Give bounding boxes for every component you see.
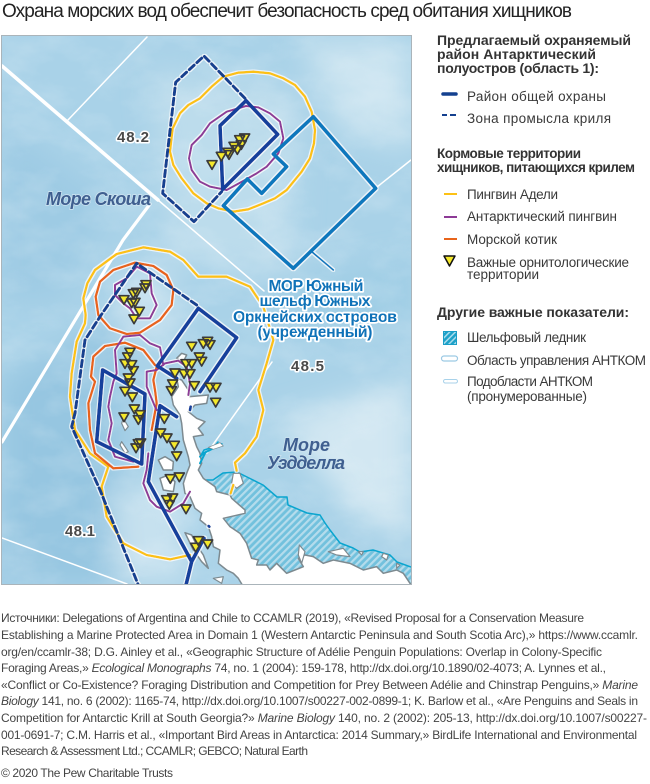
legend: fur seal: Морской котик [467, 232, 557, 247]
krill fishery zone, South Orkney [163, 56, 245, 222]
label: Weddell Sea: Море [283, 435, 330, 455]
fur seal range, north [96, 263, 173, 334]
legend: proposed protected area [437, 32, 631, 126]
chinstrap penguin ranges, Peninsula [108, 267, 190, 512]
legend: CCAMLR subareas: Подобласти АНТКОМ [467, 374, 593, 389]
important bird areas, South Orkney [207, 134, 250, 169]
legend: important bird areas: Важные орнитологические [467, 255, 629, 270]
upper overlay: South Orkney foraging ranges and zones [163, 56, 376, 270]
CCAMLR boundaries [2, 37, 411, 584]
legend heading: Предлагаемый охраняемый [437, 32, 631, 48]
sources: Research & Assessment Ltd.; CCAMLR; GEBCO; Natural Earth [1, 744, 308, 758]
legend: CCAMLR subareas: (пронумерованные) [467, 389, 587, 404]
legend: CCAMLR management area: Область управления АНТКОМ [467, 353, 646, 368]
label: Weddell Sea [266, 437, 344, 470]
sources: 001-0691-7; C.M. Harris et al., «Important Bird Areas in Antarctica: 2014 Summary,» BirdLife International and Environmental [1, 728, 637, 742]
legend heading: район Антарктический [437, 46, 596, 62]
label: South Orkney MPA: (учрежденный) [258, 324, 372, 341]
label: South Orkney MPA [233, 278, 397, 341]
label: South Orkney MPA: шельф Южных [260, 293, 371, 310]
label: South Orkney MPA: Оркнейских островов [233, 309, 397, 326]
legend: CCAMLR subareas [444, 374, 593, 404]
sources: Competition for Antarctic Krill at South Georgia?» Marine Biology 140, no. 2 (2002): 205-13, http://dx.doi.org/10.1007/s00227- [1, 711, 647, 725]
land: Antarctic Peninsula and islands [120, 353, 413, 587]
legend: important bird areas: территории [467, 267, 539, 282]
legend heading: Кормовые территории [437, 146, 581, 161]
label: Weddell Sea: Уэдделла [267, 453, 345, 473]
legend: other indicators [437, 304, 646, 404]
legend heading [437, 146, 635, 175]
legend: predator foraging ranges [437, 146, 635, 282]
important bird areas, Peninsula [119, 281, 221, 552]
copyright: © 2020 The Pew Charitable Trusts [1, 766, 173, 780]
label: subarea 48.1: 48.1 [65, 523, 95, 540]
legend: important bird areas [444, 255, 629, 282]
legend: ice shelf: Шельфовый ледник [467, 330, 586, 345]
title: Охрана морских вод обеспечит безопасность сред обитания хищников [2, 1, 572, 22]
legend: general protection zone: Район общей охраны [467, 89, 606, 104]
South Orkney shelf MPA [223, 117, 376, 268]
legend: krill fishery zone: Зона промысла криля [467, 111, 611, 126]
legend heading: хищников, питающихся крилем [437, 160, 635, 175]
sources: Biology 141, no. 6 (2002): 1165-74, http://dx.doi.org/10.1007/s00227-002-0899-1; K. Barlow et al., «Are Penguins and Seals in [1, 694, 638, 708]
label: South Orkney MPA: МОР Южный [268, 278, 364, 295]
legend heading [437, 32, 631, 76]
krill fishery zone, Peninsula [72, 263, 197, 585]
map panel [2, 36, 413, 587]
Adélie penguin range, Peninsula [70, 247, 273, 559]
fur seal range, south [88, 343, 157, 468]
general protection zones, Peninsula [97, 308, 237, 585]
legend: Adélie penguin: Пингвин Адели [467, 187, 558, 202]
legend heading: полуостров (область 1): [437, 60, 599, 76]
sources [1, 611, 647, 758]
label: Scotia Sea: Море Скоша [46, 189, 151, 209]
legend: chinstrap penguin: Антарктический пингвин [467, 209, 617, 224]
Adélie penguin range, South Orkney [170, 72, 315, 212]
legend heading: Другие важные показатели: [437, 304, 629, 320]
seafloor shading [2, 36, 411, 584]
label: subarea 48.2: 48.2 [117, 129, 149, 146]
sources: «Conflict or Co-Existence? Foraging Distribution and Competition for Prey Between Adélie and Chinstrap Penguins,» Marine [1, 678, 638, 692]
lower overlay: Peninsula foraging ranges and zones [70, 247, 273, 585]
label: subarea 48.5: 48.5 [291, 358, 324, 375]
chinstrap penguin range, South Orkney [189, 106, 283, 190]
sources: Establishing a Marine Protected Area in Domain 1 (Western Antarctic Peninsula and South Scotia Arc),» https://www.ccamlr. [1, 628, 638, 642]
general protection zone, South Orkney [220, 101, 278, 189]
ice shelf [197, 442, 411, 584]
sources: org/en/ccamlr-38; D.G. Ainley et al., «Geographic Structure of Adélie Penguin Populations: Overlap in Colony-Specific [1, 645, 602, 659]
sources: Источники: Delegations of Argentina and Chile to CCAMLR (2019), «Revised Proposal for a Conservation Measure [1, 611, 584, 625]
sources: Foraging Areas,» Ecological Monographs 74, no. 1 (2004): 159-178, http://dx.doi.org/10.1890/02-4073; A. Lynnes et al., [1, 661, 606, 675]
